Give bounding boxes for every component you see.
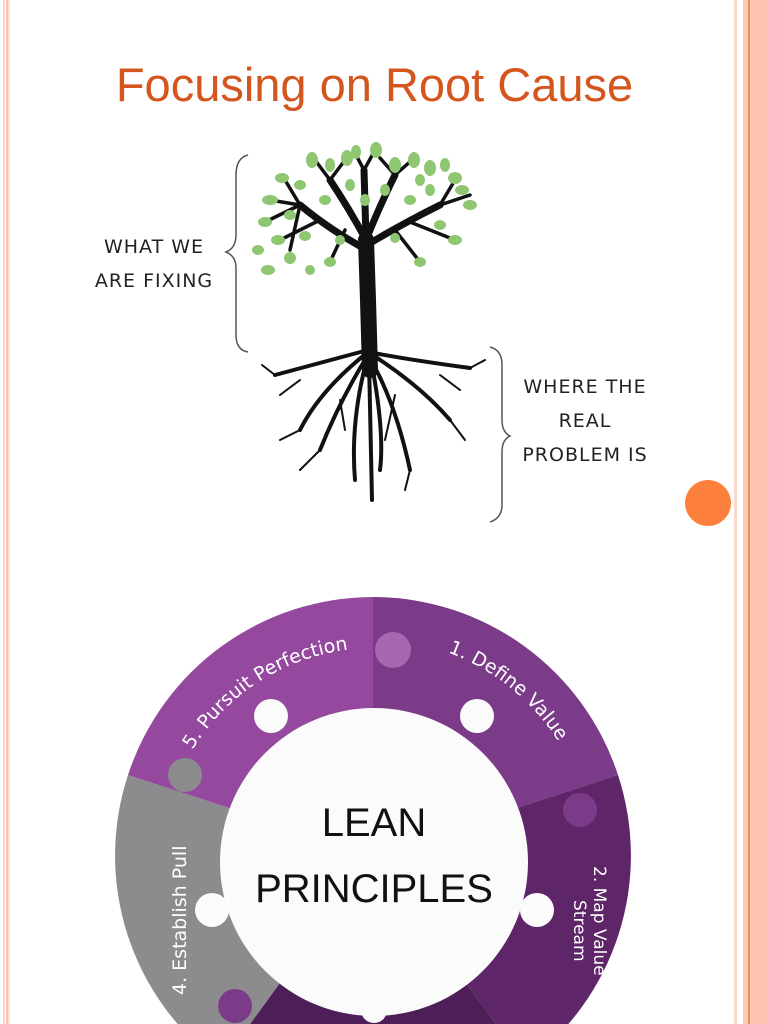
- segment 3: [250, 984, 496, 1024]
- text: what we are fixing: [95, 236, 213, 292]
- right border: [734, 0, 768, 1024]
- brace left: [226, 155, 248, 352]
- center text: [255, 801, 493, 911]
- left border lines: [3, 0, 10, 1024]
- segment labels: [169, 640, 609, 995]
- segment 1 define value: [373, 597, 618, 808]
- title: Focusing on Root Cause: [116, 58, 633, 111]
- segment labels: Stream: [569, 900, 589, 962]
- text: where the real problem is: REAL: [559, 410, 611, 432]
- orange circle: [685, 480, 731, 526]
- segment 5 pursuit perfection: [128, 597, 373, 808]
- text: what we are fixing: WHAT WE: [104, 236, 204, 258]
- center text: PRINCIPLES: [255, 867, 493, 911]
- brace right: [490, 347, 510, 522]
- inner circle: [195, 699, 554, 1023]
- segment labels: 1. Define Value: [450, 640, 565, 740]
- text: where the real problem is: WHERE THE: [523, 376, 647, 398]
- text: what we are fixing: ARE FIXING: [95, 270, 213, 292]
- tree: [262, 152, 485, 500]
- segment labels: 4. Establish Pull: [169, 846, 191, 995]
- segment labels: 2. Map Value: [589, 866, 609, 976]
- segment 2 map value stream: [467, 775, 631, 1024]
- segment 4 establish pull: [115, 775, 280, 1024]
- center text: LEAN: [322, 801, 426, 845]
- segment labels: 5. Pursuit Perfection: [182, 640, 347, 748]
- text: where the real problem is: [522, 376, 648, 466]
- lean principles wheel: [115, 597, 631, 1024]
- puzzle knobs: [375, 632, 411, 668]
- text: where the real problem is: PROBLEM IS: [522, 444, 648, 466]
